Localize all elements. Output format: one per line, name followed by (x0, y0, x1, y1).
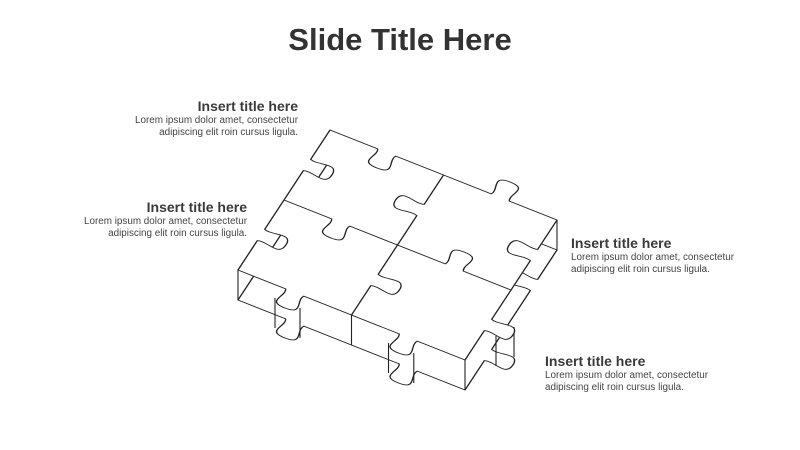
text block: mid left (84, 199, 247, 239)
text block: top left: adipiscing elit roin cursus ligula. (159, 127, 298, 138)
extruded base (228, 145, 592, 415)
text block: bottom right (545, 353, 708, 393)
title: Slide Title Here (288, 22, 512, 57)
text block: bottom right: adipiscing elit roin cursus ligula. (545, 382, 684, 393)
text block: top left (135, 98, 298, 138)
text block: mid right: Lorem ipsum dolor amet, consectetur (571, 252, 734, 263)
text block: mid right: Insert title here (571, 235, 671, 251)
piece divisions (238, 130, 557, 360)
text block: mid right: adipiscing elit roin cursus ligula. (571, 264, 710, 275)
text block: mid left: Lorem ipsum dolor amet, consectetur (84, 216, 247, 227)
text block: mid left: adipiscing elit roin cursus ligula. (108, 228, 247, 239)
text block: mid left: Insert title here (147, 199, 247, 215)
text block: mid right (571, 235, 734, 275)
text block: top left: Insert title here (198, 98, 298, 114)
text block: top left: Lorem ipsum dolor amet, consectetur (135, 115, 298, 126)
text block: bottom right: Insert title here (545, 353, 645, 369)
vertical edges (238, 220, 557, 390)
text block: bottom right: Lorem ipsum dolor amet, consectetur (545, 370, 708, 381)
top surface (228, 115, 592, 385)
